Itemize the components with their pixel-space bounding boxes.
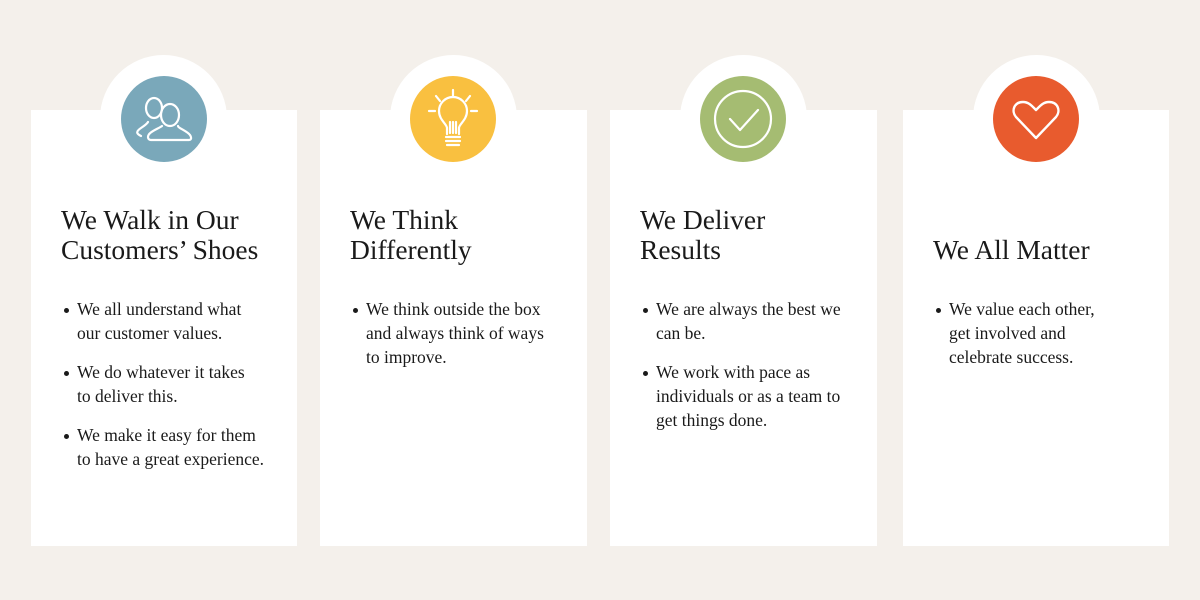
bullet list xyxy=(353,299,544,367)
bullet list: to deliver this. xyxy=(77,386,178,406)
bullet list: to have a great experience. xyxy=(77,449,264,469)
heading: Results xyxy=(640,234,721,265)
heading: We Deliver xyxy=(640,204,765,235)
icon: check xyxy=(700,76,786,162)
bullet list: We are always the best we xyxy=(656,299,841,319)
bullet list: We value each other, xyxy=(949,299,1095,319)
bullet list xyxy=(936,299,1095,367)
heading xyxy=(640,204,766,265)
bullet list: our customer values. xyxy=(77,323,222,343)
card background xyxy=(31,110,297,546)
heading xyxy=(350,204,472,265)
icon bump xyxy=(680,55,807,182)
card background xyxy=(610,110,877,546)
icon bump xyxy=(100,55,227,182)
bullet list xyxy=(64,299,264,469)
icon: heart xyxy=(993,76,1079,162)
heading xyxy=(61,204,258,265)
bullet list: celebrate success. xyxy=(949,347,1073,367)
heading: We Think xyxy=(350,204,458,235)
panel: we all matter xyxy=(903,55,1169,546)
bullet list: We think outside the box xyxy=(366,299,541,319)
bullet list: can be. xyxy=(656,323,706,343)
panel: deliver results xyxy=(610,55,877,546)
heading: We All Matter xyxy=(933,234,1090,265)
bullet list: We do whatever it takes xyxy=(77,362,245,382)
heading: Customers’ Shoes xyxy=(61,234,258,265)
bullet list: to improve. xyxy=(366,347,447,367)
bullet list: get things done. xyxy=(656,410,767,430)
card background xyxy=(320,110,587,546)
card background xyxy=(903,110,1169,546)
bullet list: and always think of ways xyxy=(366,323,544,343)
heading: Differently xyxy=(350,234,472,265)
panel: think differently xyxy=(320,55,587,546)
bullet list: get involved and xyxy=(949,323,1066,343)
bullet list: We work with pace as xyxy=(656,362,810,382)
icon bump xyxy=(973,55,1100,182)
icon: light bulb xyxy=(410,76,496,162)
bullet list: We make it easy for them xyxy=(77,425,256,445)
bullet list: We all understand what xyxy=(77,299,241,319)
icon bump xyxy=(390,55,517,182)
icon: people xyxy=(121,76,207,162)
bullet list xyxy=(643,299,841,430)
panel: customers xyxy=(31,55,297,546)
heading: We Walk in Our xyxy=(61,204,239,235)
bullet list: individuals or as a team to xyxy=(656,386,840,406)
